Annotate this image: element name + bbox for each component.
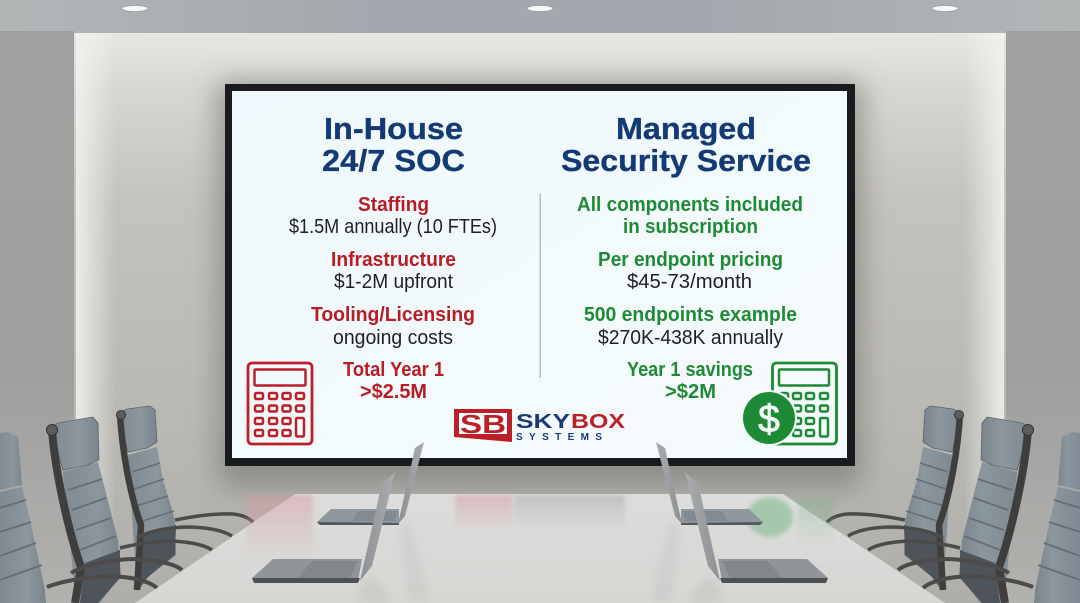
in-house cost list: Tooling/Licensing <box>311 303 475 326</box>
in-house cost list: ongoing costs <box>333 326 453 349</box>
chairs: left row <box>0 406 253 603</box>
managed service list: in subscription <box>623 215 758 238</box>
icon: red calculator <box>248 363 312 444</box>
logo: skybox systems: SB <box>460 409 506 439</box>
managed service list <box>577 193 803 403</box>
in-house cost list: Total Year 1 <box>343 358 444 381</box>
logo: skybox systems: SYSTEMS <box>516 432 602 443</box>
left wall <box>0 31 74 603</box>
heading: in-house: 24/7 SOC <box>322 143 465 178</box>
icon: green calculator with dollar coin <box>741 363 836 446</box>
logo: skybox systems <box>454 409 625 443</box>
heading: managed service: Security Service <box>561 143 811 178</box>
managed service list: 500 endpoints example <box>584 303 797 326</box>
heading: managed service <box>561 111 811 178</box>
in-house cost list: $1-2M upfront <box>334 270 453 293</box>
ceiling <box>0 0 1080 34</box>
logo: skybox systems: SKY <box>516 410 570 433</box>
managed service list: >$2M <box>665 380 716 403</box>
heading: managed service: Managed <box>616 111 756 146</box>
in-house cost list: Staffing <box>358 193 429 216</box>
managed service list: All components included <box>577 193 803 216</box>
divider <box>540 194 541 378</box>
managed service list: Per endpoint pricing <box>598 248 783 271</box>
chairs: right row <box>827 406 1080 603</box>
in-house cost list: >$2.5M <box>360 380 427 403</box>
in-house cost list <box>289 193 497 403</box>
icon: green calculator with dollar coin: $ <box>758 398 780 441</box>
heading: in-house <box>322 111 465 178</box>
table <box>135 494 945 603</box>
managed service list: $270K-438K annually <box>598 326 784 349</box>
managed service list: $45-73/month <box>627 270 752 293</box>
managed service list: Year 1 savings <box>627 358 753 381</box>
laptops: right pair <box>656 442 828 583</box>
laptops: left pair <box>252 442 424 583</box>
right wall <box>1006 31 1080 603</box>
logo: skybox systems: BOX <box>571 410 625 433</box>
heading: in-house: In-House <box>324 111 463 146</box>
in-house cost list: $1.5M annually (10 FTEs) <box>289 215 497 238</box>
tv screen <box>225 84 855 466</box>
in-house cost list: Infrastructure <box>331 248 456 271</box>
ceiling lights <box>122 6 958 12</box>
